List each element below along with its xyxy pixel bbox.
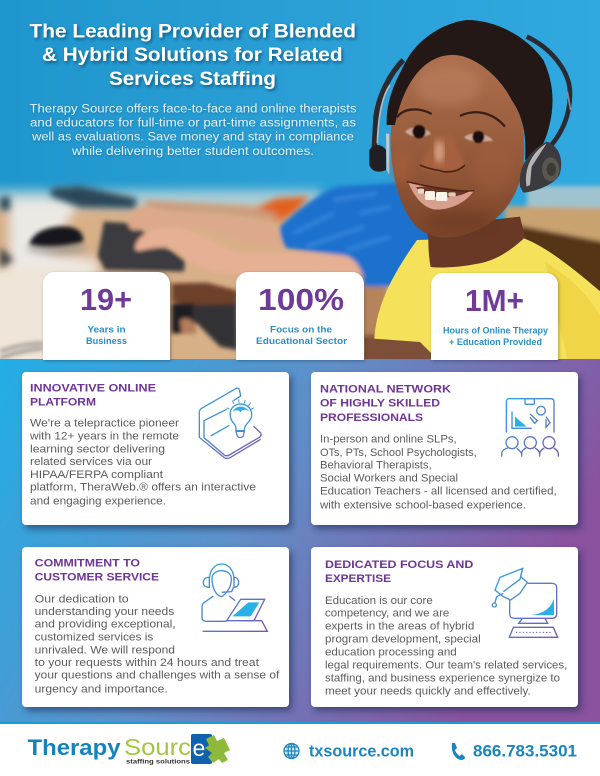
body text: with 12+ years in the remote (29, 431, 179, 443)
stat card: 19+ years (43, 272, 170, 360)
stat card: 19+ years: 19+ (80, 282, 132, 317)
tile e: e (192, 735, 205, 761)
body text: urgency and importance. (35, 684, 168, 696)
body text: to your requests within 24 hours and treat (35, 657, 259, 669)
eyes (405, 125, 493, 143)
body text: Education Teachers - all licensed and certified, (320, 486, 557, 498)
body text: unrivaled. We will respond (35, 644, 175, 656)
panel: national network (311, 372, 578, 525)
body text: staffing, and business experience synergize to (325, 672, 560, 684)
icon: laptop with light bulb (199, 388, 261, 458)
icon: globe (284, 744, 299, 758)
stat card: 19+ years: Business (86, 336, 127, 346)
intro paragraph: well as evaluations. Save money and stay in compliance (31, 132, 354, 144)
body text: understanding your needs (35, 606, 175, 618)
body text: OTs, PTs, School Psychologists, (320, 447, 477, 459)
face (391, 54, 524, 238)
title: The Leading Provider of Blended (30, 22, 356, 42)
body text: Social Workers and Special (320, 473, 458, 485)
yellow shirt (374, 237, 600, 362)
intro paragraph: while delivering better student outcomes. (71, 146, 314, 158)
logo: Therapy Source staffing solutions: staffing solutions (126, 759, 191, 766)
body text: HIPAA/FERPA compliant (30, 469, 163, 481)
left headset (374, 60, 403, 152)
body text (35, 593, 280, 696)
body text: In-person and online SLPs, (320, 434, 457, 446)
stat card: 1M+ hours: + Education Provided (449, 337, 542, 347)
gradient panel background (0, 359, 600, 723)
neck (425, 217, 525, 268)
panel: customer service (22, 547, 289, 707)
body text (319, 434, 557, 512)
stat card: 1M+ hours: 1M+ (465, 283, 524, 318)
heading: OF HIGHLY SKILLED (320, 398, 440, 410)
heading: NATIONAL NETWORK (320, 384, 451, 396)
stat card: 100% focus (236, 272, 364, 360)
heading (325, 559, 474, 585)
heading (35, 557, 159, 584)
icon: graduation cap over computer (492, 568, 558, 637)
body text: Education is our core (325, 595, 433, 607)
blurred classroom background (0, 180, 437, 377)
heading: COMMITMENT TO (35, 557, 140, 569)
body text: learning sector delivering (30, 443, 165, 455)
title: & Hybrid Solutions for Related (42, 45, 342, 66)
right headset (527, 37, 570, 147)
footer background (0, 722, 600, 776)
body text: related services via our (30, 456, 152, 468)
hair (387, 20, 553, 160)
heading (30, 383, 156, 409)
body text: competency, and we are (325, 608, 449, 620)
body text: and engaging experience. (30, 496, 166, 508)
title (30, 22, 356, 90)
heading (320, 384, 451, 424)
body text: We're a telepractice pioneer (30, 418, 179, 430)
intro paragraph: Therapy Source offers face-to-face and online therapists (30, 104, 357, 116)
heading: CUSTOMER SERVICE (35, 572, 159, 584)
puzzle piece (205, 735, 230, 763)
eyebrows (397, 109, 432, 117)
heading: EXPERTISE (325, 573, 391, 585)
right desk (505, 186, 600, 310)
intro paragraph (30, 104, 357, 158)
body text: your questions and challenges with a sense of (35, 670, 280, 682)
stat card: 1M+ hours (431, 273, 558, 360)
icon: agent with headset and laptop (202, 564, 267, 631)
boy's head and headset (369, 20, 571, 268)
stat card: 1M+ hours: Hours of Online Therapy (443, 326, 548, 336)
body text: customized services is (35, 632, 154, 644)
stat card: 19+ years: Years in (88, 324, 126, 334)
body text: education processing and (325, 646, 457, 658)
body text: Our dedication to (35, 593, 129, 605)
body text: program development, special (325, 633, 481, 645)
icon: phone (452, 743, 465, 760)
heading: DEDICATED FOCUS AND (325, 559, 474, 571)
logo: Therapy Source staffing solutions: Sourc (124, 734, 191, 760)
body text: legal requirements. Our team's related services, (325, 659, 567, 671)
hero photo: boy with headset in a computer classroom (0, 0, 600, 377)
stat card: 100% focus: Focus on the (270, 324, 332, 334)
heading: PROFESSIONALS (320, 412, 423, 424)
panel: innovative online platform (22, 372, 289, 525)
logo: Therapy Source staffing solutions: Therapy (28, 735, 121, 760)
body text: and providing exceptional, (35, 619, 176, 631)
heading: PLATFORM (30, 397, 96, 409)
logo: Therapy Source staffing solutions (28, 734, 230, 766)
heading: INNOVATIVE ONLINE (30, 383, 156, 395)
title: Services Staffing (109, 69, 276, 90)
website: txsource.com (309, 742, 414, 760)
phone number: 866.783.5301 (473, 742, 577, 760)
icon: teacher at a board with students (502, 399, 558, 457)
stat card: 100% focus: Educational Sector (256, 336, 348, 346)
body text: Behavioral Therapists, (320, 460, 432, 472)
body text (325, 595, 567, 697)
body text: experts in the areas of hybrid (325, 621, 474, 633)
body text: platform, TheraWeb.® offers an interactive (30, 482, 256, 494)
body text: meet your needs quickly and effectively. (325, 685, 531, 697)
body text (29, 418, 256, 508)
intro paragraph: and educators for full-time or part-time assignments, as (30, 118, 356, 130)
stat card: 100% focus: 100% (258, 282, 344, 317)
tile e (191, 734, 212, 764)
body text: with extensive school-based experience. (319, 500, 526, 512)
nose (420, 135, 465, 171)
panel: dedicated focus and expertise (311, 547, 578, 707)
smile (408, 183, 474, 210)
